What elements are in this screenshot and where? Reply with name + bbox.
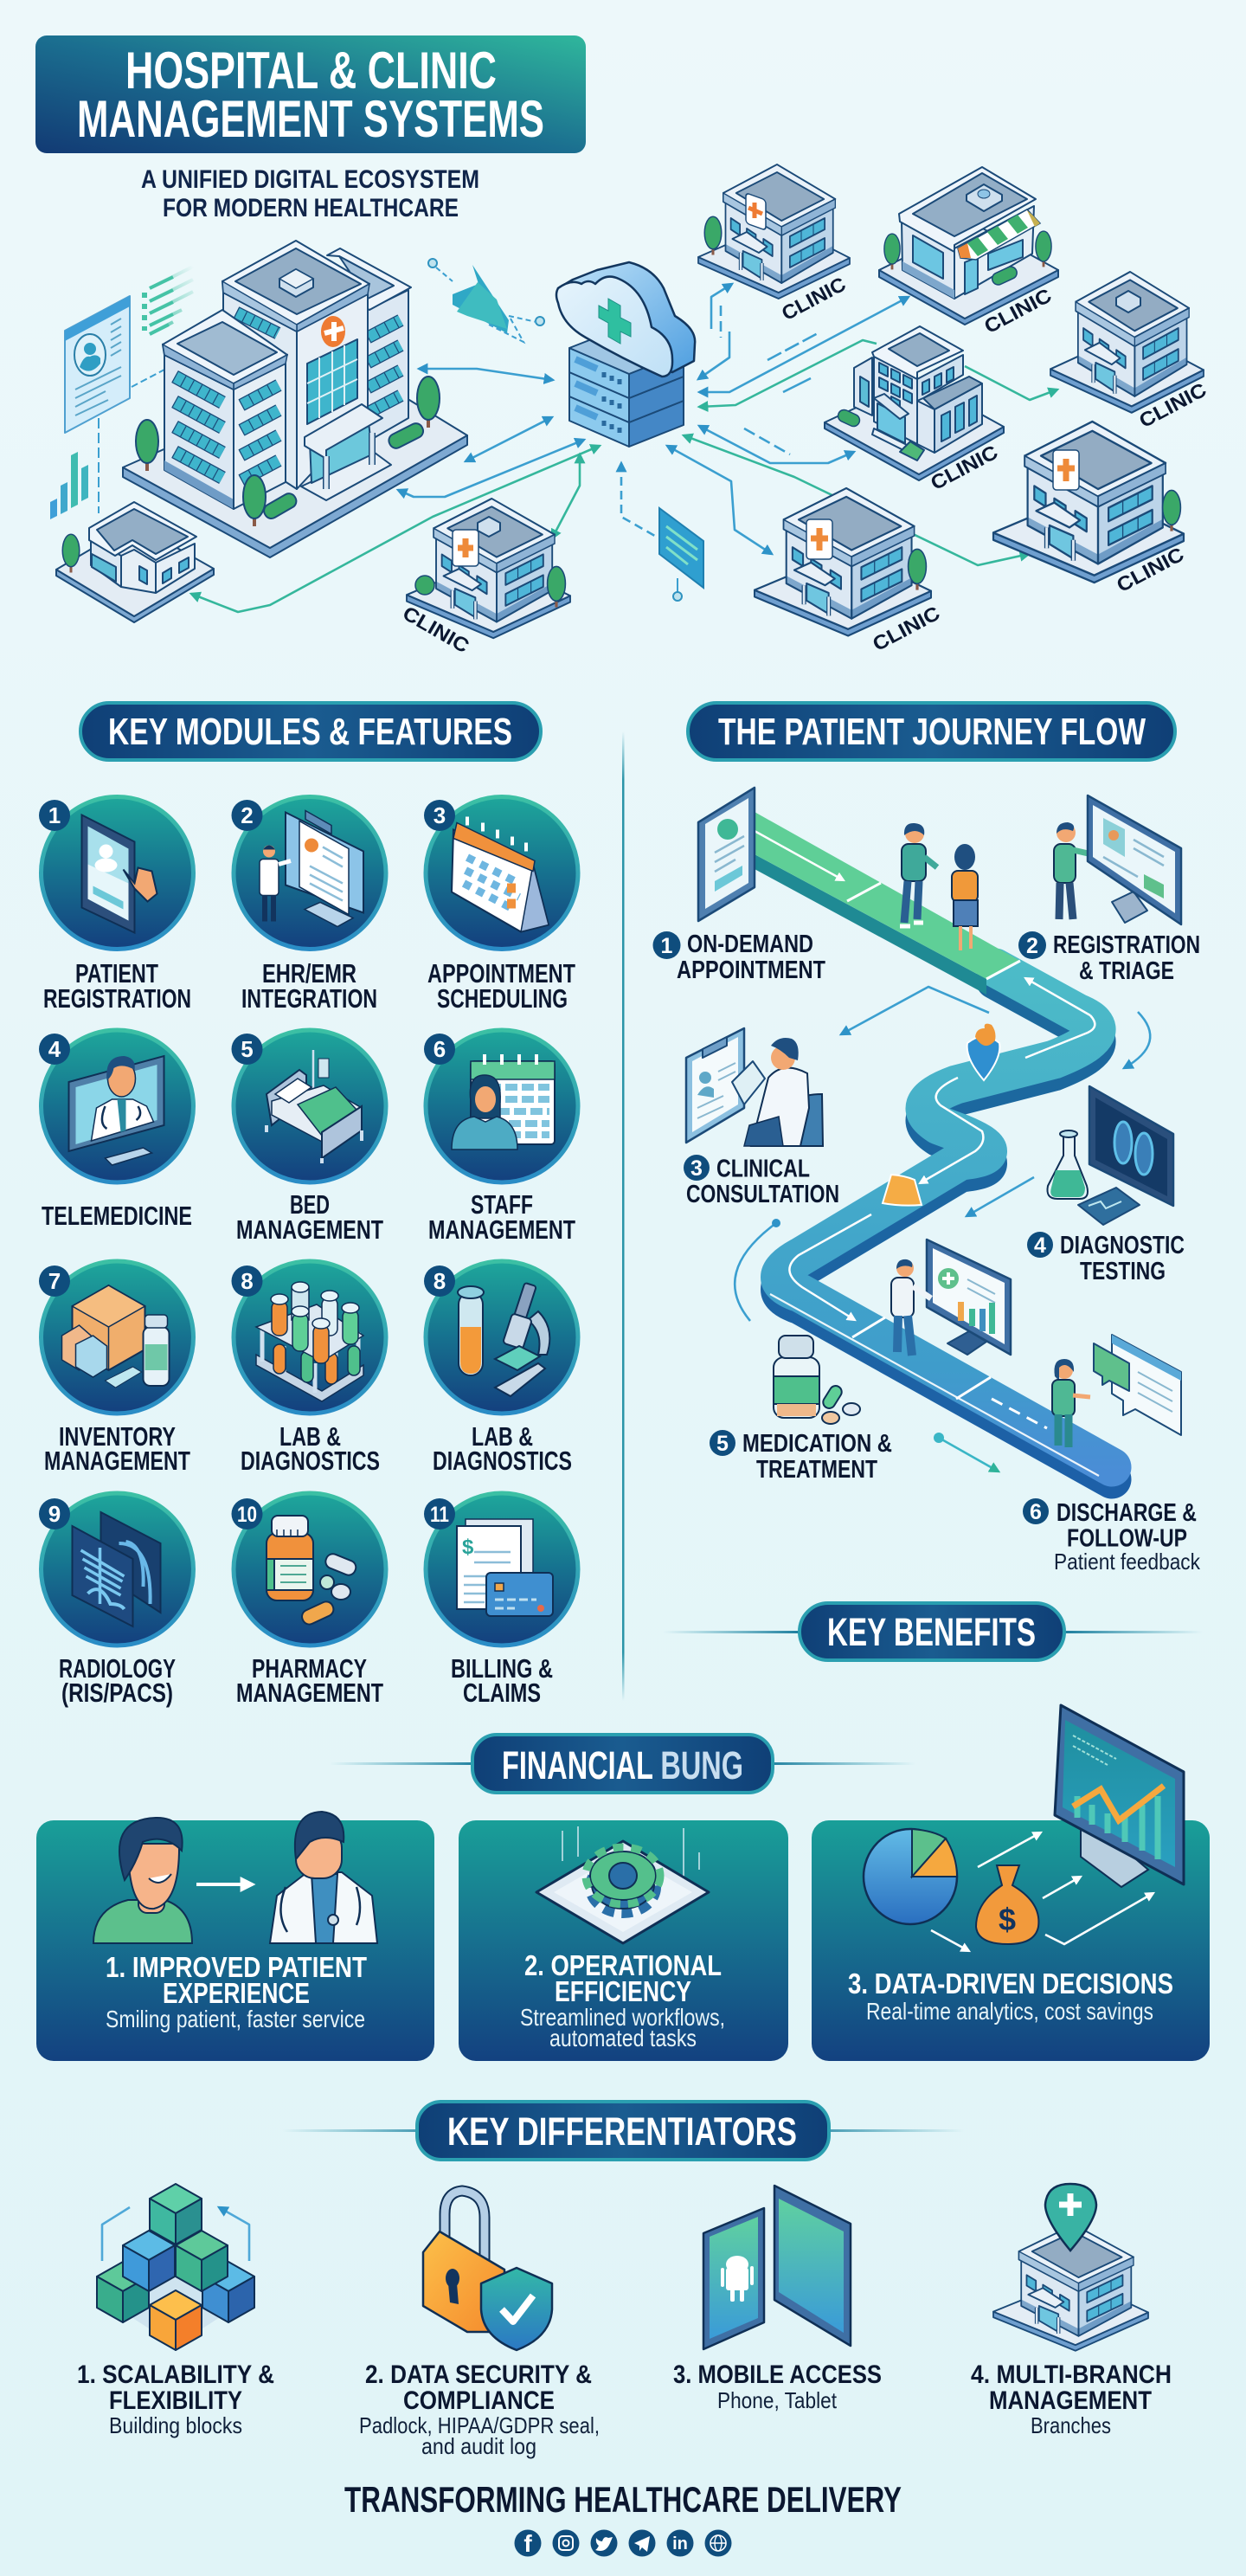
card text: EFFICIENCY [555,1975,691,2007]
step labels 1 and 2: & TRIAGE [1079,957,1174,985]
clinic F: CLINIC [869,602,943,655]
clinic F [755,488,943,655]
badge 8 [232,1265,263,1297]
medication bottle and pills [774,1336,860,1424]
step 3 label: 3 [690,1156,703,1181]
bar chart icon [50,452,88,519]
growth arrows [931,1832,1153,1951]
label: (RIS/PACS) [61,1678,173,1708]
map data card [428,259,544,342]
step labels 1 and 2: APPOINTMENT [677,956,825,984]
clinic G: CLINIC [399,602,473,657]
badge 7 [39,1265,70,1297]
icon: multi-branch building [993,2184,1148,2351]
clinic C [1050,272,1210,432]
module 7: inventory management [39,1261,194,1476]
patient avatar [93,1818,192,1943]
clinic A [698,164,850,325]
badge 9 [39,1498,70,1530]
location pin marker [967,1024,999,1080]
module 1: patient registration [39,796,194,1014]
social icons: f [523,2530,532,2557]
patient profile card [65,296,164,513]
patient journey road [755,812,1112,1479]
label: MANAGEMENT [236,1214,383,1245]
label [428,1189,575,1245]
step 5 label: TREATMENT [756,1456,877,1484]
title banner: MANAGEMENT SYSTEMS [77,90,544,148]
icon: phone and tablet [703,2186,851,2349]
badge 10: 10 [237,1503,257,1527]
clinic G [399,499,570,657]
heading: key differentiators [282,2102,964,2160]
heading: financial [330,1735,915,1793]
step 5 label: 5 [716,1432,729,1456]
module 4: telemedicine [39,1030,194,1231]
heading: patient journey [688,703,1175,760]
step 2 person and monitor [1054,795,1181,924]
badge 3 [424,800,455,831]
label: INVENTORY [59,1421,176,1452]
subtitle: A UNIFIED DIGITAL ECOSYSTEM [141,165,479,194]
vertical column divider [622,731,625,1701]
differentiator 3 text [673,2360,882,2413]
module 10: pharmacy [232,1493,386,1708]
clinic A: CLINIC [778,273,850,325]
hospital building [123,241,467,557]
heading: key differentiators: KEY DIFFERENTIATORS [447,2109,797,2154]
label: PHARMACY [252,1653,367,1684]
data lines panel [145,267,193,334]
step labels 1 and 2: 2 [1026,934,1038,958]
card text: 3. DATA-DRIVEN DECISIONS [848,1967,1173,2000]
card text: 1. IMPROVED PATIENT [106,1951,367,1983]
clinic C: CLINIC [1135,378,1210,432]
journey flow arrows [735,987,1150,1472]
doctor avatar [270,1812,377,1943]
label: MANAGEMENT [428,1214,575,1245]
step 6 label: 6 [1030,1500,1042,1524]
step 4 diagnostic [1047,1086,1173,1225]
label [43,958,191,1014]
heading: key benefits: KEY BENEFITS [827,1610,1036,1654]
network connection arrows [191,284,1057,612]
title banner: HOSPITAL & CLINIC [125,42,497,100]
icon: padlock and shield [423,2191,552,2350]
label [433,1421,572,1476]
step labels 1 and 2: 1 [661,934,673,958]
badge 1: 1 [48,802,61,828]
document card [659,508,703,601]
label [44,1421,190,1476]
arrow [196,1883,253,1886]
module 3: appointment scheduling [424,796,578,1014]
badge 9: 9 [48,1501,61,1527]
title banner [35,35,586,153]
label: DIAGNOSTICS [433,1446,572,1476]
label [241,1421,380,1476]
analytics monitor [1055,1705,1184,1887]
clinic B with awning [879,167,1058,338]
label: MANAGEMENT [236,1678,383,1708]
gear on platform icon [536,1826,709,1943]
heading: key modules [80,703,541,760]
badge 6 [424,1034,455,1065]
badge 10 [232,1498,263,1530]
module 8: lab tube and microscope [424,1261,578,1476]
step 3 consultation [686,1028,823,1146]
differentiator 4 text: 4. MULTI-BRANCH [971,2360,1172,2389]
orange road marker [883,1175,922,1206]
step 6 label [1023,1498,1201,1575]
pie chart [864,1829,957,1924]
clinic D: CLINIC [927,441,1001,494]
small unlabelled branch building [56,502,214,622]
differentiator 1 text: Building blocks [109,2412,242,2438]
badge 4: 4 [48,1036,61,1062]
step 3 label [684,1155,839,1208]
badge 11 [424,1498,455,1530]
label: LAB & [472,1421,533,1452]
central cloud server [556,262,695,447]
card text: Smiling patient, faster service [106,2006,365,2032]
people on green path [900,823,978,950]
discharge person and feedback [1052,1335,1181,1447]
step labels 1 and 2: ON-DEMAND [687,931,813,958]
heading: key modules: KEY MODULES & FEATURES [108,711,512,753]
label: EHR/EMR [262,958,356,989]
card text: Real-time analytics, cost savings [866,1998,1153,2025]
clinic D [825,326,1004,494]
differentiator 1 text: 1. SCALABILITY & [77,2360,274,2389]
label: RADIOLOGY [59,1653,176,1684]
badge 11: 11 [430,1503,449,1527]
differentiator 3 text: Phone, Tablet [717,2387,838,2413]
heading: key benefits [663,1603,1203,1660]
heading: financial: FINANCIAL BUNG [502,1743,743,1787]
differentiator 2 text: Padlock, HIPAA/GDPR seal, [359,2412,600,2438]
card text: automated tasks [549,2025,697,2051]
differentiator 2 text: 2. DATA SECURITY & [365,2360,592,2389]
step 4 label [1027,1232,1185,1285]
step 5 label [710,1430,892,1484]
step 4 label: TESTING [1080,1258,1166,1285]
icon: building blocks [95,2184,256,2350]
differentiator 2 text [359,2360,600,2459]
clinic B with awning: CLINIC [980,284,1055,338]
module 5: bed management [232,1030,386,1245]
step 3 label: CONSULTATION [686,1181,839,1208]
module 6: staff management [424,1030,578,1245]
differentiator 3 text: 3. MOBILE ACCESS [673,2360,882,2389]
badge 4 [39,1034,70,1065]
differentiator 1 text [77,2360,274,2438]
money bag [976,1865,1038,1944]
module 9: radiology [39,1493,194,1708]
card text [520,1949,725,2051]
step 3 label: CLINICAL [716,1155,810,1182]
differentiator 4 text: MANAGEMENT [989,2386,1152,2415]
badge 8 second: 8 [434,1268,446,1294]
label: DIAGNOSTICS [241,1446,380,1476]
label [427,958,575,1014]
step labels 1 and 2 [652,931,1200,985]
card text: Streamlined workflows, [520,2004,725,2031]
card text: 2. OPERATIONAL [524,1949,722,1981]
label: CLAIMS [463,1678,541,1708]
step labels 1 and 2: REGISTRATION [1053,931,1200,959]
clinic E: CLINIC [1113,543,1187,596]
step 6 label: DISCHARGE & [1057,1499,1197,1527]
step 6 label: FOLLOW-UP [1067,1525,1187,1553]
money bag: $ [999,1902,1016,1937]
badge 2 [232,800,263,831]
card text: EXPERIENCE [163,1977,310,2009]
card: data-driven decisions [812,1705,1210,2061]
label: INTEGRATION [241,983,377,1014]
label: MANAGEMENT [44,1446,190,1476]
subtitle [141,165,479,222]
label [59,1653,176,1708]
social icons [514,2529,732,2557]
module 2: EHR/EMR integration [232,796,386,1014]
badge 7: 7 [48,1268,61,1294]
card: operational efficiency [459,1820,788,2061]
module 11: billing: $ [462,1536,474,1559]
label [451,1653,553,1708]
module 8: lab tube rack [232,1261,386,1476]
module 11: billing [424,1493,578,1708]
card: improved patient experience [36,1812,434,2061]
label: APPOINTMENT [427,958,575,989]
subtitle: FOR MODERN HEALTHCARE [163,194,459,222]
badge 8 second [424,1265,455,1297]
badge 2: 2 [241,802,254,828]
label [236,1653,383,1708]
clinic E [993,422,1187,596]
label: TELEMEDICINE [42,1201,192,1231]
label: PATIENT [75,958,158,989]
step 4 label: 4 [1034,1233,1046,1258]
card text [106,1951,367,2032]
badge 5: 5 [241,1036,254,1062]
label [236,1189,383,1245]
medication person and monitor [891,1240,1011,1356]
label: BILLING & [451,1653,553,1684]
badge 1 [39,800,70,831]
label [241,958,377,1014]
step 4 label: DIAGNOSTIC [1060,1232,1185,1259]
step 6 label: Patient feedback [1054,1549,1201,1575]
label: BED [290,1189,330,1220]
differentiator 2 text: and audit log [421,2433,536,2459]
step 1 tablet [698,788,755,921]
social icons: in [672,2534,688,2553]
label: SCHEDULING [437,983,568,1014]
differentiator 1 text: FLEXIBILITY [109,2386,242,2415]
card text [848,1967,1173,2025]
footer tagline: TRANSFORMING HEALTHCARE DELIVERY [344,2479,902,2520]
label: REGISTRATION [43,983,191,1014]
badge 8: 8 [241,1268,254,1294]
label: STAFF [471,1189,533,1220]
differentiator 4 text: Branches [1031,2412,1111,2438]
label: LAB & [279,1421,341,1452]
step 5 label: MEDICATION & [742,1430,892,1458]
badge 6: 6 [434,1036,446,1062]
differentiator 4 text [971,2360,1172,2438]
badge 5 [232,1034,263,1065]
differentiator 2 text: COMPLIANCE [403,2386,555,2415]
badge 3: 3 [434,802,446,828]
